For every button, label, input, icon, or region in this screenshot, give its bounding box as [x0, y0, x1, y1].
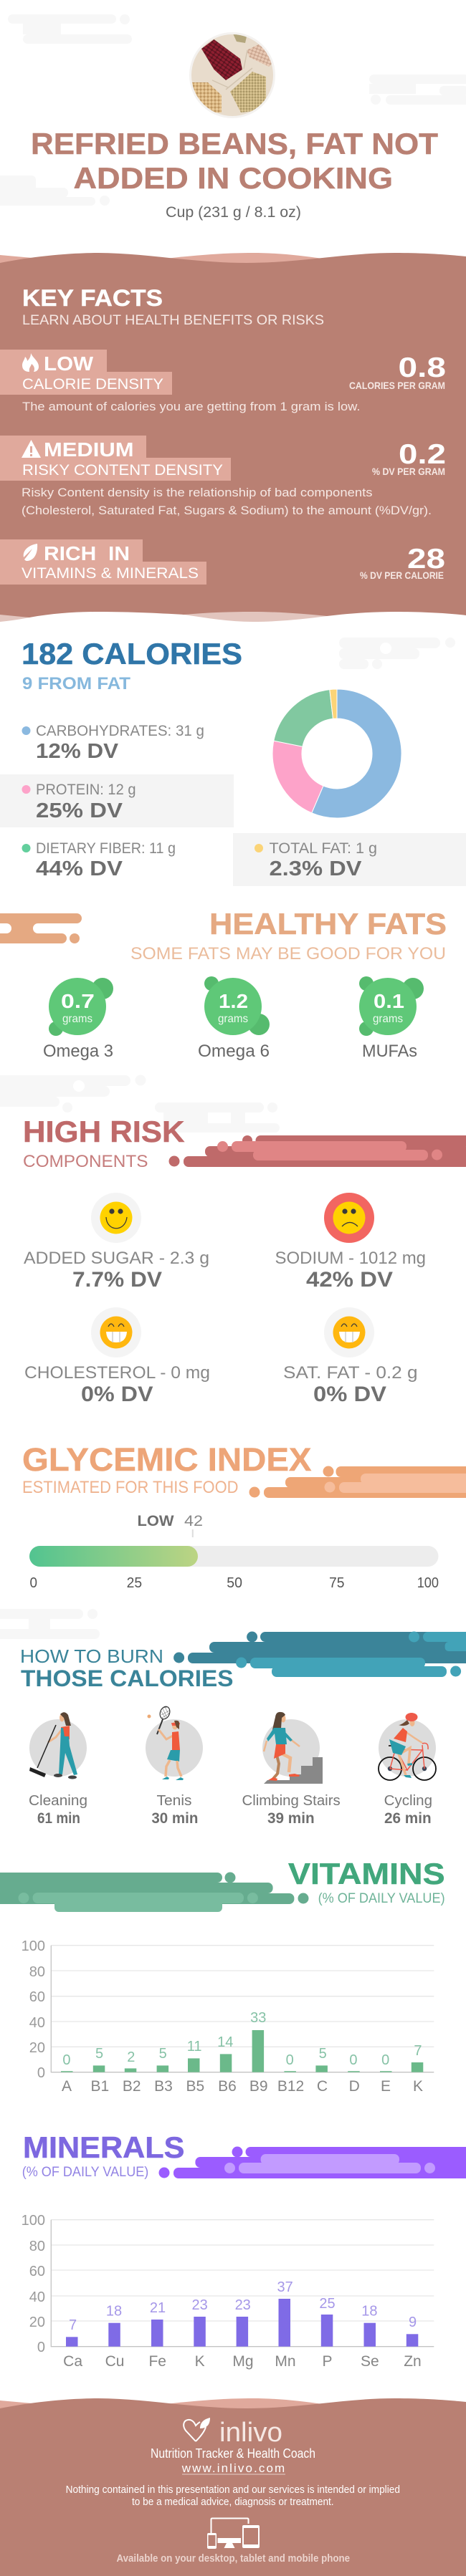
icon: flame: [22, 353, 39, 372]
omega 6 badge: grams: [218, 1013, 248, 1025]
minerals bar chart: 0: [37, 2340, 45, 2355]
calories heading: 9 FROM FAT: [22, 674, 130, 693]
key facts heading: LEARN ABOUT HEALTH BENEFITS OR RISKS: [22, 312, 324, 328]
vitamins bar chart: 5: [95, 2046, 103, 2062]
vitamins bar chart: 40: [29, 2015, 45, 2031]
calories heading: 182 CALORIES: [22, 637, 242, 671]
activity: cycling: Cycling: [384, 1793, 432, 1809]
icon: inlivo heart logo: [184, 2418, 210, 2441]
omega 6 badge: Omega 6: [198, 1042, 270, 1061]
panel: high risk components: [23, 1115, 466, 1406]
icon: grinning face: [324, 1307, 374, 1357]
legend: dietary fiber: DIETARY FIBER: 11 g: [36, 840, 176, 857]
item: sodium: [275, 1193, 426, 1292]
minerals bar chart: Zn: [404, 2353, 422, 2370]
minerals bar chart: [22, 2213, 434, 2370]
omega 3 badge: grams: [62, 1013, 92, 1025]
high risk decoration: [169, 1135, 466, 1167]
panel: calories: [0, 637, 466, 886]
icon: cyclist: [379, 1713, 436, 1780]
glycemic heading: GLYCEMIC INDEX: [22, 1441, 311, 1478]
key facts heading: [22, 285, 324, 328]
vitamins decoration: [0, 1873, 308, 1912]
minerals bar chart: 21: [150, 2300, 166, 2316]
healthy fats heading: HEALTHY FATS: [209, 907, 447, 941]
fact: medium risky content density: (Cholesterol, Saturated Fat, Sugars & Sodium) to the amount (%DV/gr).: [22, 504, 432, 517]
vitamins bar chart: K: [413, 2078, 423, 2095]
website link: www.inlivo.com: [181, 2461, 285, 2475]
vitamins bar chart: B5: [186, 2078, 204, 2095]
omega 6 badge: 1.2: [219, 990, 248, 1012]
vitamins bar chart: 5: [319, 2046, 327, 2062]
minerals bar chart: K: [195, 2353, 205, 2370]
burn decoration: [173, 1632, 466, 1677]
fact: low calorie density: The amount of calories you are getting from 1 gram is low.: [22, 400, 360, 413]
vitamins bar chart: E: [381, 2078, 391, 2095]
vitamins bar chart: 80: [29, 1964, 45, 1980]
fact: medium risky content density: [0, 436, 446, 517]
activity: tennis: 30 min: [151, 1810, 198, 1827]
item: saturated fat: 0% DV: [313, 1383, 386, 1406]
vitamins bar chart: 0: [62, 2052, 70, 2068]
fact: rich in vitamins and minerals: [0, 539, 445, 585]
gauge scale: 75: [329, 1575, 344, 1591]
vitamins bar chart: D: [349, 2078, 360, 2095]
activity: cycling: 26 min: [384, 1810, 432, 1827]
high risk heading: HIGH RISK: [23, 1115, 185, 1148]
minerals bar chart: 20: [29, 2315, 45, 2330]
vitamins bar chart: 0: [286, 2052, 294, 2068]
item: cholesterol: [24, 1307, 210, 1406]
vitamins bar chart: 33: [250, 2010, 266, 2026]
omega 3 badge: [43, 978, 113, 1061]
tagline: Nutrition Tracker & Health Coach: [151, 2446, 315, 2461]
omega 6 badge: [198, 976, 270, 1061]
panel: footer: [0, 2398, 466, 2576]
background decoration: top clouds: [0, 14, 466, 206]
panel: minerals: [22, 2130, 466, 2370]
minerals bar chart: Mn: [275, 2353, 296, 2370]
activity: climbing stairs: 39 min: [267, 1810, 315, 1827]
vitamins heading: [288, 1857, 445, 1906]
mufas badge: MUFAs: [362, 1042, 417, 1061]
vitamins bar chart: 0: [349, 2052, 357, 2068]
activity: cleaning: [29, 1712, 87, 1827]
minerals bar chart: 25: [319, 2296, 336, 2312]
minerals bar chart: P: [322, 2353, 333, 2370]
gauge scale: 25: [127, 1575, 142, 1591]
mufas badge: [359, 976, 424, 1061]
minerals bar chart: 9: [409, 2315, 417, 2330]
minerals bar chart: 60: [29, 2264, 45, 2279]
icon: sad face: [324, 1193, 374, 1243]
disclaimer: [66, 2484, 400, 2508]
vitamins bar chart: B9: [249, 2078, 268, 2095]
vitamins bar chart: 7: [414, 2043, 422, 2059]
panel: healthy fats: [0, 907, 447, 1061]
minerals bar chart: Se: [361, 2353, 379, 2370]
burn heading: [20, 1645, 234, 1691]
calories heading: [22, 637, 242, 693]
mufas badge: grams: [373, 1013, 403, 1025]
minerals bar chart: 18: [106, 2304, 122, 2320]
item: saturated fat: [283, 1307, 417, 1406]
fact: medium risky content density: % DV PER GRAM: [372, 466, 445, 477]
minerals heading: [22, 2130, 185, 2180]
gauge scale: [30, 1575, 439, 1591]
gauge value: [138, 1513, 203, 1537]
serving size: Cup (231 g / 8.1 oz): [166, 204, 301, 221]
vitamins bar chart: 60: [29, 1989, 45, 2005]
fact: low calorie density: [0, 350, 446, 413]
panel: key facts: [0, 253, 466, 638]
disclaimer: to be a medical advice, diagnosis or treatment.: [132, 2496, 334, 2508]
icon: devices: [207, 2519, 260, 2549]
gauge value: LOW: [138, 1513, 174, 1529]
vitamins bar chart: C: [317, 2078, 328, 2095]
fact: medium risky content density: MEDIUM: [44, 438, 133, 461]
gauge bar: [29, 1546, 439, 1567]
item: saturated fat: SAT. FAT - 0.2 g: [283, 1363, 417, 1383]
legend: dietary fiber: 44% DV: [36, 857, 123, 880]
vitamins bar chart: 100: [22, 1938, 45, 1954]
minerals heading: (% OF DAILY VALUE): [22, 2165, 148, 2180]
panel: glycemic index: [22, 1441, 466, 1591]
food photo: beans in sacks: [189, 32, 275, 118]
minerals bar chart: 40: [29, 2289, 45, 2305]
gauge scale: 50: [227, 1575, 242, 1591]
minerals bar chart: Cu: [105, 2353, 124, 2370]
legend: carbohydrates: CARBOHYDRATES: 31 g: [36, 723, 204, 739]
vitamins bar chart: B2: [123, 2078, 141, 2095]
icon: smiling face: [91, 1193, 141, 1243]
minerals bar chart: 7: [69, 2317, 77, 2333]
legend: total fat: TOTAL FAT: 1 g: [270, 840, 377, 857]
availability note: Available on your desktop, tablet and mobile phone: [116, 2552, 350, 2565]
vitamins bar chart: 11: [187, 2039, 201, 2054]
legend: dietary fiber: [22, 840, 176, 880]
fact: low calorie density: 0.8: [399, 352, 446, 383]
activity: cleaning: Cleaning: [29, 1793, 87, 1809]
omega 3 badge: Omega 3: [43, 1042, 113, 1061]
minerals decoration: [159, 2146, 466, 2178]
minerals bar chart: 23: [235, 2297, 251, 2313]
panel: vitamins: [0, 1857, 445, 2095]
vitamins heading: (% OF DAILY VALUE): [318, 1890, 445, 1906]
title: ADDED IN COOKING: [73, 161, 393, 195]
fact: rich in vitamins and minerals: RICH IN: [44, 542, 130, 564]
fact: low calorie density: CALORIE DENSITY: [22, 376, 163, 393]
mufas badge: 0.1: [374, 990, 404, 1012]
vitamins heading: VITAMINS: [288, 1857, 445, 1890]
minerals bar chart: 100: [22, 2213, 45, 2229]
legend: protein: PROTEIN: 12 g: [36, 782, 136, 798]
vitamins bar chart: 0: [381, 2052, 389, 2068]
icon: grinning face: [91, 1307, 141, 1357]
icon: tennis player: [146, 1705, 203, 1780]
legend: total fat: 2.3% DV: [270, 857, 362, 880]
legend: protein: 25% DV: [36, 799, 123, 822]
activity: tennis: [146, 1705, 203, 1827]
icon: warning triangle: [22, 440, 41, 458]
healthy fats decoration: [0, 913, 82, 943]
minerals bar chart: 80: [29, 2239, 45, 2254]
fact: rich in vitamins and minerals: 28: [407, 544, 445, 575]
vitamins bar chart: B12: [277, 2078, 304, 2095]
vitamins bar chart: 20: [29, 2040, 45, 2056]
fact: low calorie density: CALORIES PER GRAM: [349, 380, 445, 391]
gauge scale: 100: [417, 1575, 439, 1591]
vitamins bar chart: 2: [127, 2049, 135, 2065]
vitamins bar chart: B1: [90, 2078, 109, 2095]
vitamins bar chart: [22, 1938, 434, 2095]
vitamins bar chart: B6: [218, 2078, 237, 2095]
legend: protein: [22, 782, 136, 822]
burn heading: HOW TO BURN: [20, 1645, 163, 1667]
omega 3 badge: 0.7: [61, 990, 95, 1012]
legend: total fat: [255, 840, 377, 880]
minerals bar chart: 18: [361, 2304, 378, 2320]
healthy fats heading: [130, 907, 447, 963]
activity: cleaning: 61 min: [37, 1810, 80, 1827]
item: added sugar: ADDED SUGAR - 2.3 g: [24, 1249, 209, 1268]
fact: rich in vitamins and minerals: % DV PER CALORIE: [360, 569, 444, 581]
title: REFRIED BEANS, FAT NOT: [31, 127, 438, 160]
gauge scale: 0: [30, 1575, 37, 1591]
burn heading: THOSE CALORIES: [21, 1666, 234, 1691]
item: added sugar: [24, 1193, 209, 1292]
minerals heading: MINERALS: [23, 2130, 185, 2164]
glycemic heading: ESTIMATED FOR THIS FOOD: [22, 1478, 238, 1497]
fact: medium risky content density: 0.2: [399, 439, 446, 470]
brand name: inlivo: [219, 2418, 282, 2448]
fact: rich in vitamins and minerals: VITAMINS & MINERALS: [22, 565, 199, 582]
icon: leaf: [24, 544, 37, 561]
healthy fats heading: SOME FATS MAY BE GOOD FOR YOU: [130, 944, 446, 963]
item: cholesterol: CHOLESTEROL - 0 mg: [24, 1363, 210, 1383]
panel: how to burn those calories: [20, 1632, 466, 1827]
vitamins bar chart: 0: [37, 2065, 45, 2081]
activity: tennis: Tenis: [156, 1793, 192, 1809]
minerals bar chart: 23: [191, 2297, 208, 2313]
minerals bar chart: Mg: [232, 2353, 254, 2370]
fact: medium risky content density: Risky Content density is the relationship of bad components: [22, 486, 373, 499]
background decoration: burn cloud: [0, 1609, 100, 1639]
glycemic heading: [22, 1441, 311, 1497]
vitamins bar chart: 5: [159, 2046, 167, 2062]
vitamins bar chart: B3: [154, 2078, 173, 2095]
vitamins bar chart: A: [62, 2078, 72, 2095]
icon: woman sweeping: [29, 1712, 87, 1779]
legend: carbohydrates: 12% DV: [36, 740, 119, 763]
item: added sugar: 7.7% DV: [72, 1268, 162, 1292]
activity: climbing stairs: [242, 1712, 341, 1827]
donut chart: [272, 689, 401, 818]
activity: climbing stairs: Climbing Stairs: [242, 1793, 341, 1809]
item: cholesterol: 0% DV: [81, 1383, 153, 1406]
background decoration: high risk clouds: [0, 1075, 280, 1133]
gauge value: 42: [184, 1513, 203, 1529]
key facts heading: KEY FACTS: [22, 285, 163, 311]
legend: carbohydrates: [22, 723, 204, 763]
activity: cycling: [379, 1713, 436, 1827]
icon: woman on stairs: [262, 1712, 323, 1784]
item: sodium: 42% DV: [306, 1268, 393, 1292]
fact: medium risky content density: RISKY CONTENT DENSITY: [22, 462, 223, 479]
minerals bar chart: Ca: [63, 2353, 82, 2370]
high risk heading: [23, 1115, 185, 1171]
fact: low calorie density: LOW: [44, 352, 94, 375]
disclaimer: Nothing contained in this presentation and our services is intended or implied: [66, 2484, 400, 2496]
title: [31, 127, 438, 195]
glycemic decoration: [249, 1466, 466, 1498]
minerals bar chart: Fe: [148, 2353, 166, 2370]
background decoration: calories cloud: [339, 638, 455, 669]
item: sodium: SODIUM - 1012 mg: [275, 1249, 426, 1268]
minerals bar chart: 37: [277, 2279, 293, 2295]
high risk heading: COMPONENTS: [23, 1152, 148, 1171]
vitamins bar chart: 14: [217, 2034, 233, 2050]
